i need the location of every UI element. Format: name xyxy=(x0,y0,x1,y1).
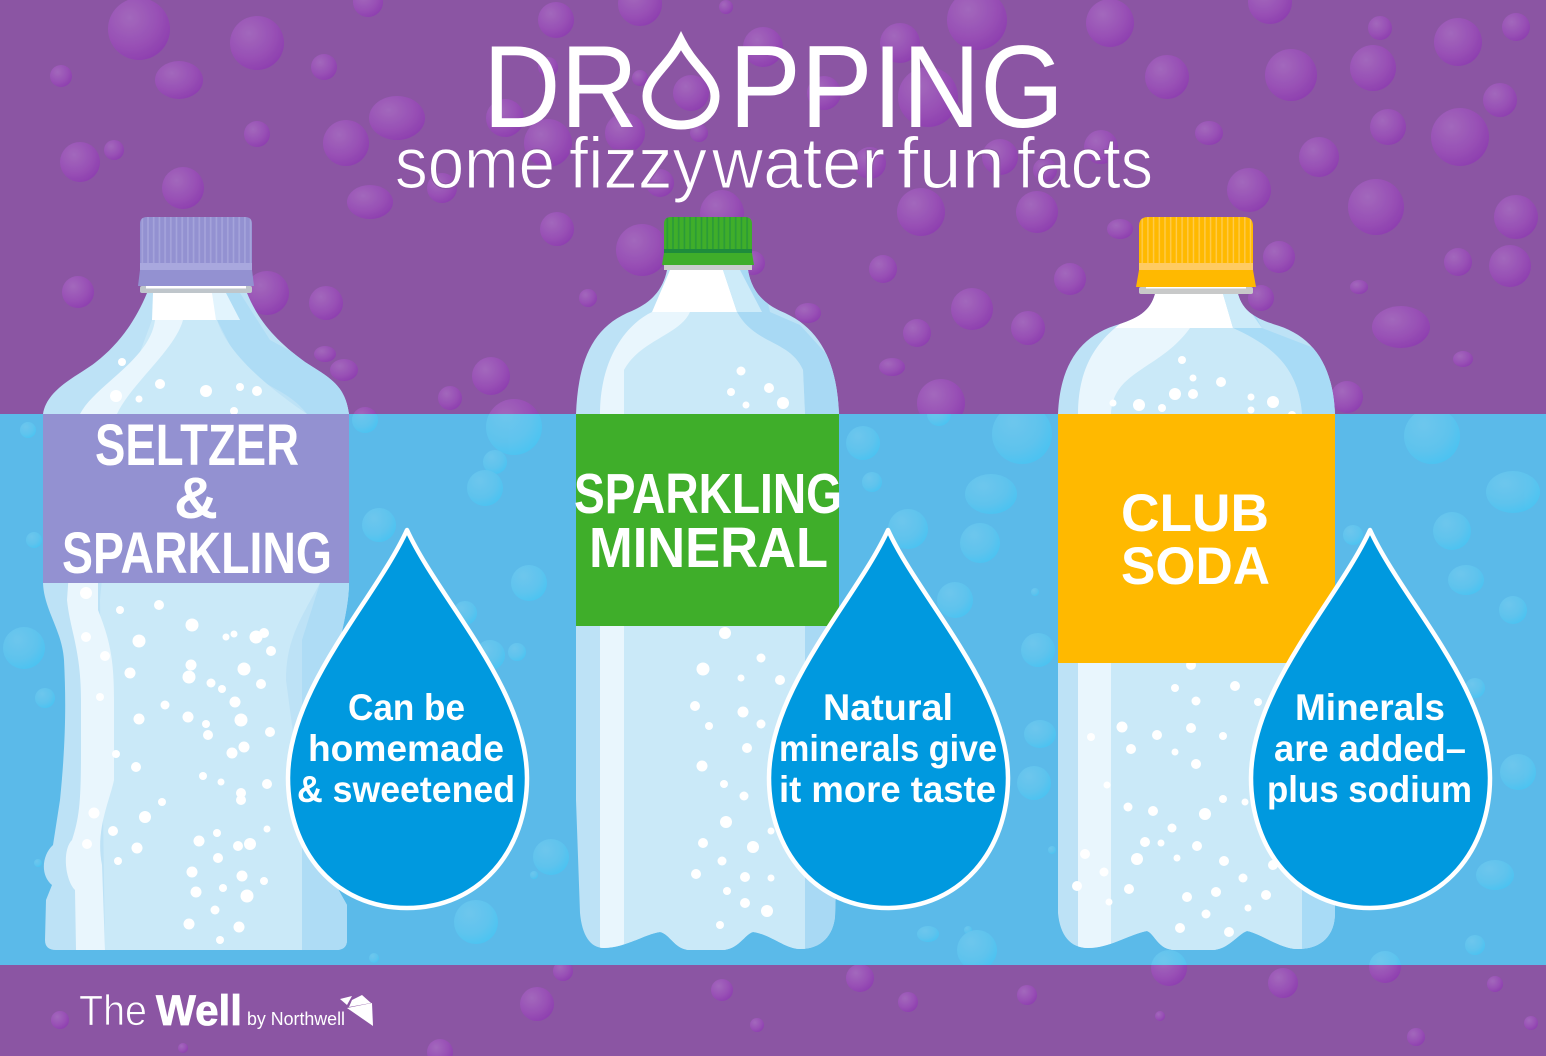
label text: MINERAL xyxy=(589,516,828,580)
footer logo: The Well by Northwell xyxy=(79,987,373,1035)
callout drop: club soda xyxy=(1251,530,1490,908)
icon: water drop letter xyxy=(647,41,715,125)
callout drop: seltzer xyxy=(288,530,527,908)
drop text: Can be xyxy=(348,687,465,728)
bubbles in bottle xyxy=(690,366,789,929)
title: DR xyxy=(483,21,638,152)
bubbles in bottle xyxy=(1072,356,1296,937)
title: PPING xyxy=(729,21,1064,152)
drop text xyxy=(779,687,997,810)
label text: SPARKLING xyxy=(62,521,332,586)
label xyxy=(43,414,349,583)
cap xyxy=(1136,217,1256,294)
drop text: it more taste xyxy=(779,769,996,810)
drop text xyxy=(297,687,515,810)
label text: SPARKLING xyxy=(574,462,842,526)
drop text: minerals give xyxy=(779,728,997,769)
cap xyxy=(138,217,254,293)
footer logo: The Well by Northwell: by Northwell xyxy=(247,1009,345,1029)
drop text: & sweetened xyxy=(297,769,515,810)
drop text xyxy=(1267,687,1472,810)
drop text: are added– xyxy=(1274,728,1466,769)
subtitle xyxy=(395,124,1153,204)
drop text: Minerals xyxy=(1295,687,1445,728)
drop text: plus sodium xyxy=(1267,769,1472,810)
label xyxy=(1058,414,1335,663)
blue water band xyxy=(0,414,1546,965)
bottle: sparkling mineral xyxy=(570,217,850,955)
label xyxy=(576,414,839,626)
label text xyxy=(62,413,332,586)
drop shape xyxy=(769,530,1008,908)
callout drop: sparkling mineral xyxy=(769,530,1008,908)
icon: origami bird xyxy=(340,995,373,1026)
bottle body xyxy=(570,265,850,955)
footer logo: The Well by Northwell: The xyxy=(79,987,147,1035)
footer logo: The Well by Northwell: Well xyxy=(156,987,242,1035)
drop shape xyxy=(288,530,527,908)
label text: & xyxy=(174,466,218,531)
title xyxy=(483,21,1064,152)
bubbles in bottle xyxy=(80,358,276,944)
label text: SODA xyxy=(1121,537,1270,596)
label text: SELTZER xyxy=(95,413,299,478)
subtitle: facts xyxy=(1017,124,1153,204)
blue bubbles background xyxy=(3,399,1540,986)
subtitle: fizzy xyxy=(569,124,707,204)
subtitle: water xyxy=(711,124,885,204)
label text: CLUB xyxy=(1121,484,1269,543)
bottle body xyxy=(1050,285,1345,955)
bottle: seltzer and sparkling xyxy=(30,217,360,960)
subtitle: some xyxy=(395,124,555,204)
drop text: Natural xyxy=(823,687,953,728)
bottle body xyxy=(43,293,349,950)
label text xyxy=(1121,484,1270,596)
drop text: homemade xyxy=(308,728,504,769)
bottle: club soda xyxy=(1050,217,1345,955)
drop shape xyxy=(1251,530,1490,908)
subtitle: fun xyxy=(897,124,1005,204)
label text xyxy=(574,462,842,580)
cap xyxy=(662,217,754,270)
